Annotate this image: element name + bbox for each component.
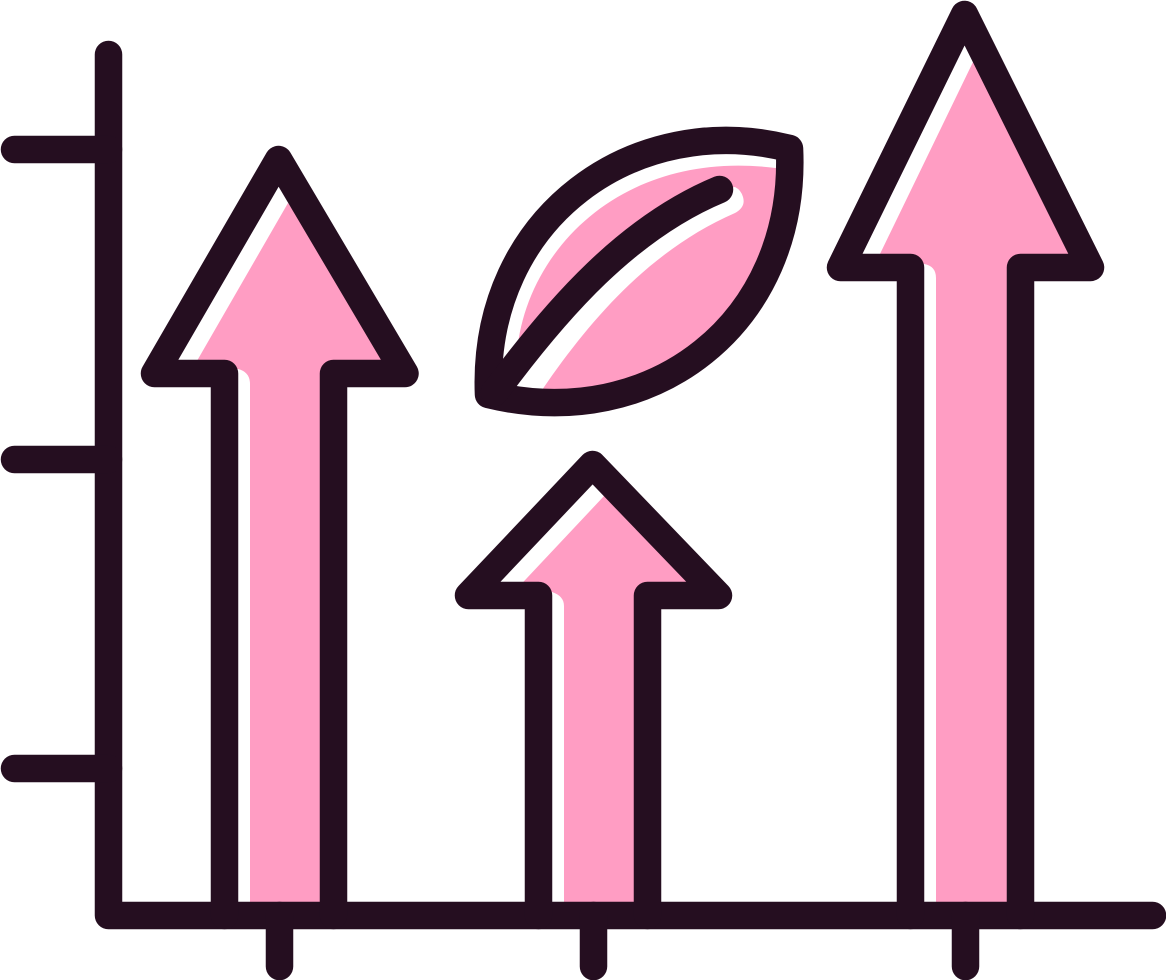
arrow: middle <box>468 464 718 916</box>
fill: middle arrow <box>511 495 718 915</box>
arrow: right <box>840 14 1090 916</box>
fill: right arrow <box>879 60 1090 915</box>
icon: leaf <box>488 140 790 403</box>
arrow: left <box>154 160 405 916</box>
fill: leaf <box>517 166 789 395</box>
pink fills <box>190 60 1090 915</box>
fill: left arrow <box>190 203 404 915</box>
